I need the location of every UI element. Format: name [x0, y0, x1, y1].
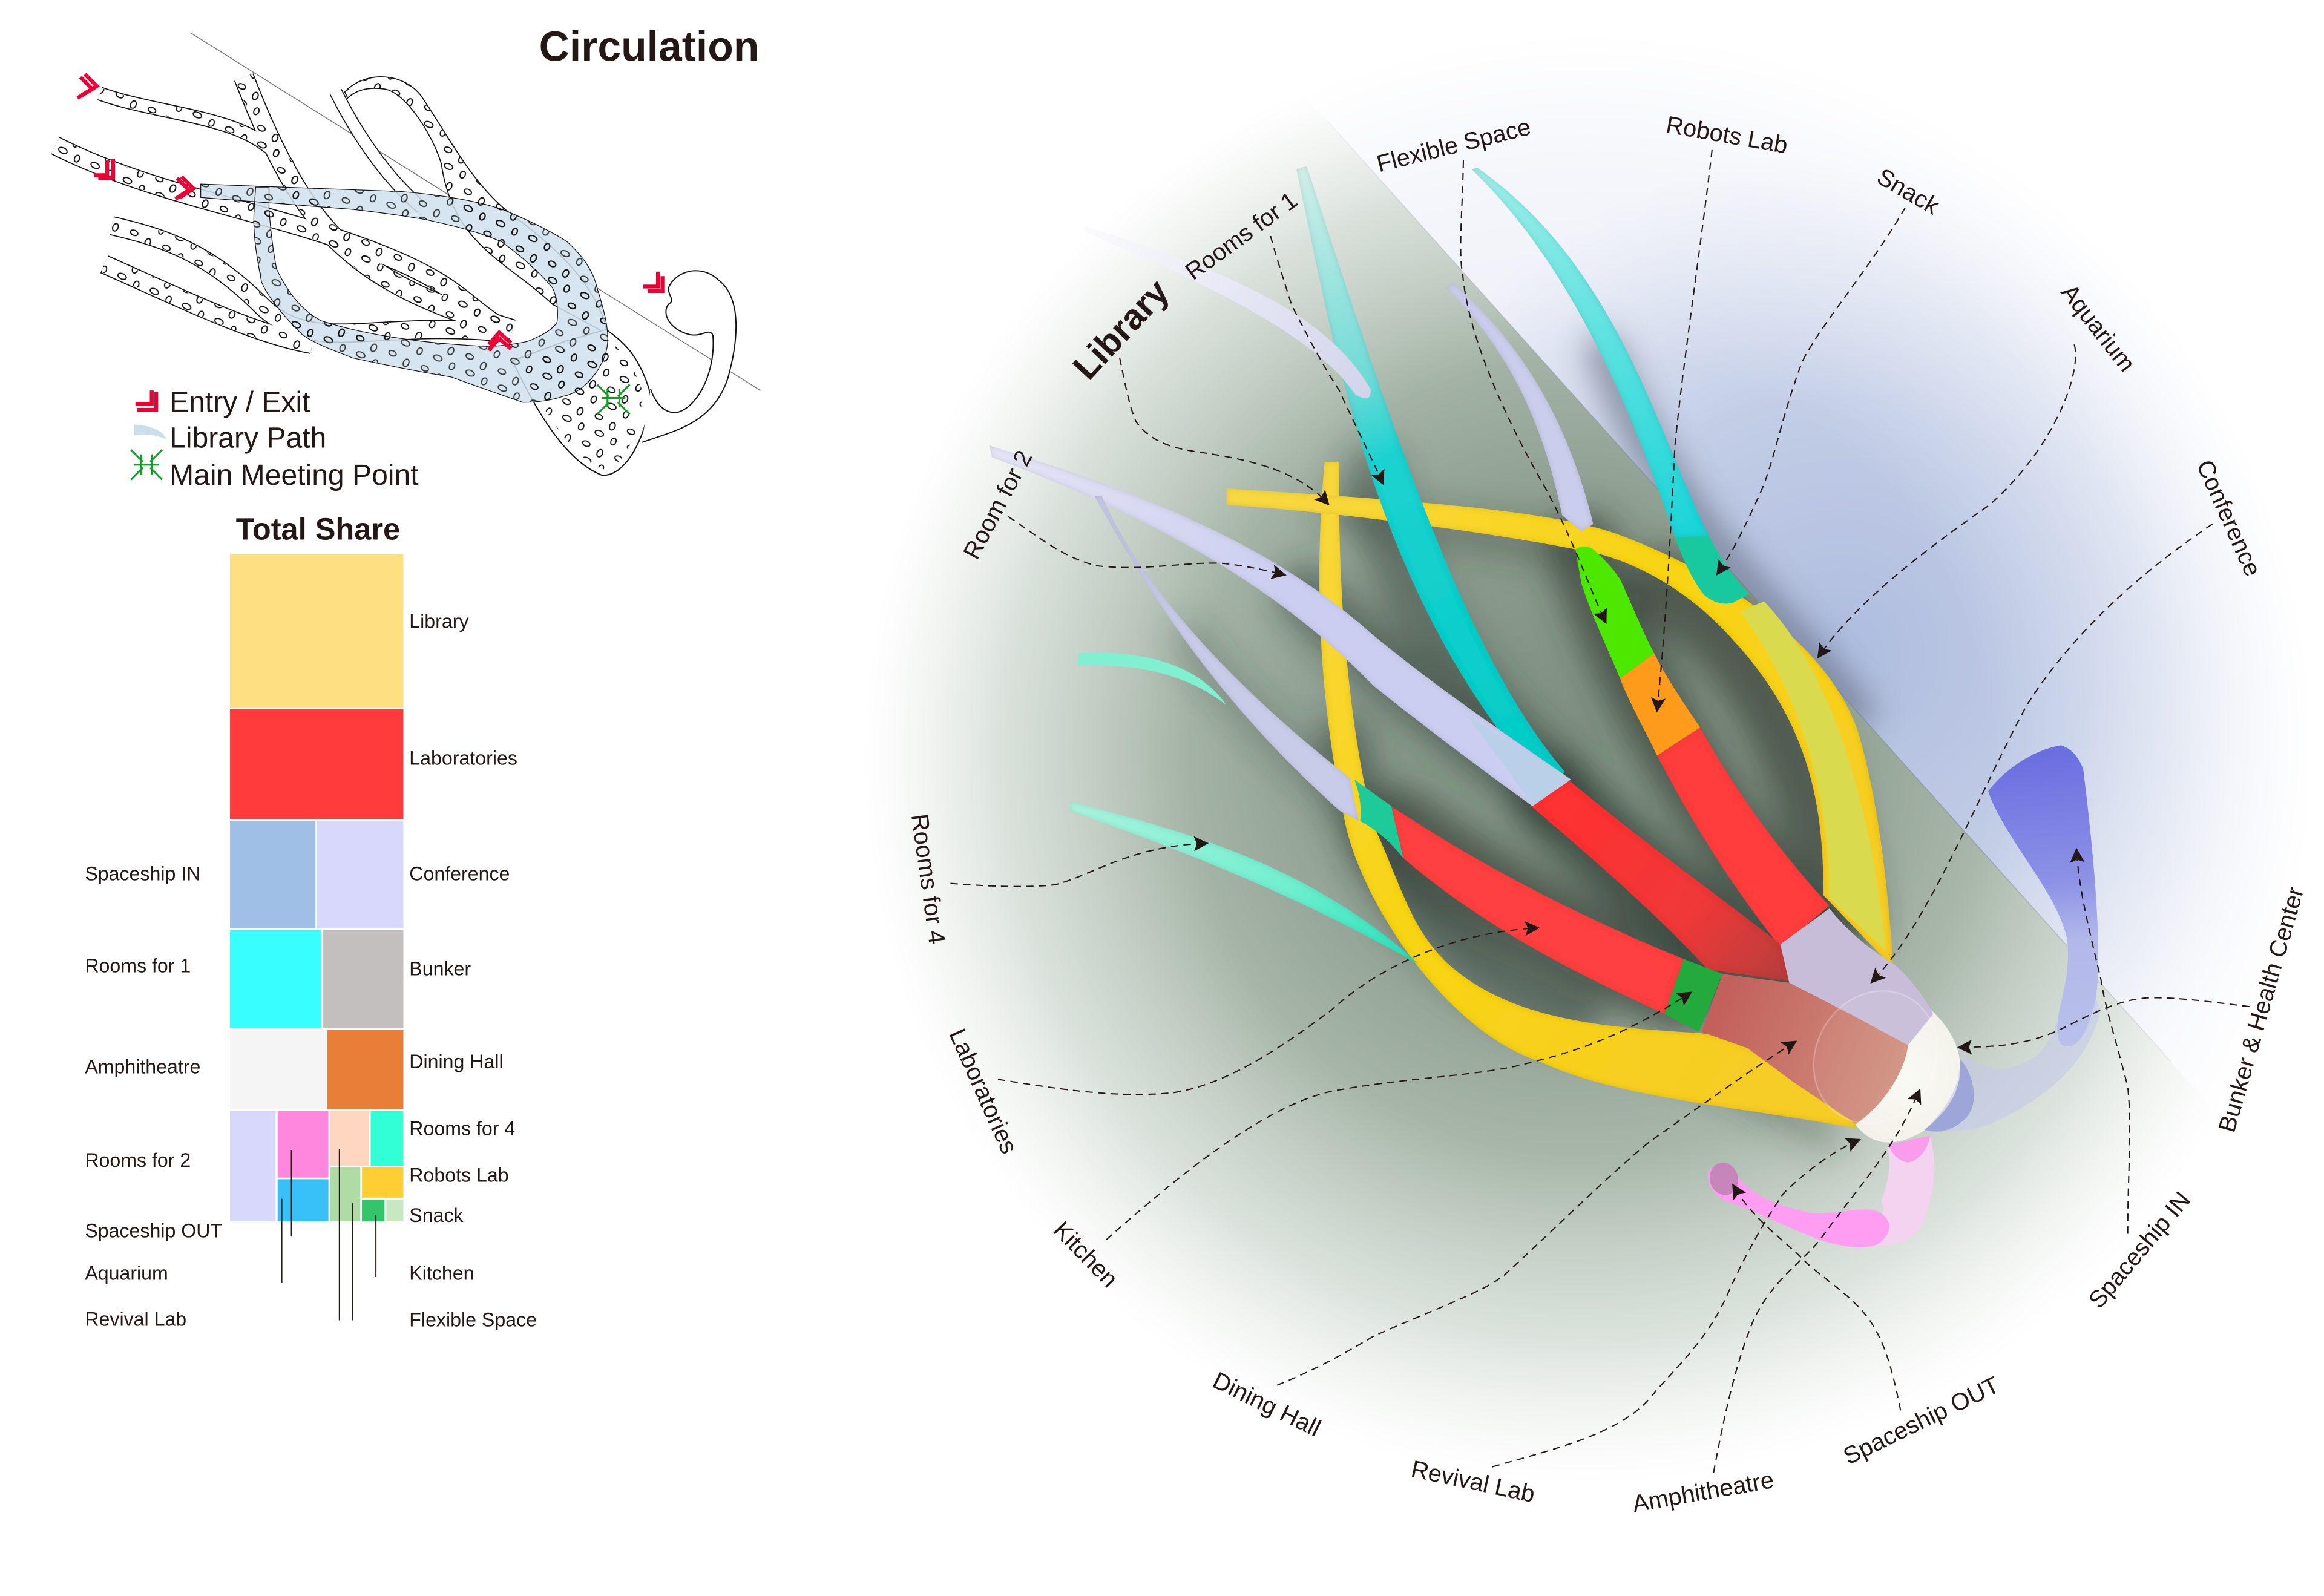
hairpin tube [345, 77, 608, 334]
tube: library main arc [1227, 488, 1893, 968]
legend: main meeting point: Main Meeting Point [169, 459, 419, 491]
radial labels: Revival Lab [1409, 1456, 1537, 1508]
leader: Conference [1873, 524, 2213, 981]
green field [906, 125, 2185, 1436]
treemap labels: Rooms for 4 [409, 1117, 515, 1139]
main meeting point marker [597, 384, 630, 414]
leader: Library [1120, 358, 1328, 504]
tube: thin lavender [1446, 282, 1594, 531]
tube: bunker link [1925, 965, 2101, 1131]
tube: rooms for 1 [1296, 166, 1565, 787]
panel: circulation sketch [55, 33, 760, 475]
appendix tail [642, 271, 736, 442]
treemap labels: Amphitheatre [85, 1056, 200, 1077]
field divider [1328, 121, 2171, 1062]
radial labels: Rooms for 1 [1181, 187, 1302, 285]
panel: circular field background [906, 121, 2253, 1436]
tube: center green segment [1575, 547, 1654, 678]
leader: Room for 2 [1008, 517, 1284, 574]
diagram: spaceship tube structure [989, 166, 2101, 1247]
radial labels: Snack [1873, 163, 1944, 220]
legend: entry / exit: Entry / Exit [169, 386, 310, 419]
leader: Snack [1718, 208, 1905, 573]
crescent [1925, 1059, 1974, 1132]
radial labels: Dining Hall [1209, 1367, 1325, 1442]
treemap labels: Dining Hall [409, 1051, 504, 1072]
library translucent overlay [1740, 601, 1886, 950]
end capsule glass highlight [1790, 968, 1961, 1146]
end capsule: white sphere [1841, 995, 1960, 1143]
treemap labels: Aquarium [85, 1262, 168, 1284]
leader: Amphitheatre [1713, 1091, 1919, 1473]
leader: Rooms for 4 [950, 843, 1206, 887]
tube: rooms top lavender [1084, 226, 1371, 398]
tube: bunker and health center [1988, 745, 2098, 1046]
radial labels: Laboratories [944, 1025, 1022, 1158]
treemap labels: Rooms for 1 [85, 955, 191, 977]
treemap labels: Snack [409, 1204, 464, 1226]
heading: Total Share: Total Share [236, 512, 400, 547]
treemap labels: Library [409, 611, 469, 632]
tube outlines [55, 77, 513, 344]
leader: Revival Lab [1492, 1140, 1858, 1467]
spot pattern [55, 77, 513, 344]
tube: spaceship out [1707, 1164, 1889, 1247]
axis line [190, 33, 760, 390]
tube: spaceship out pale [1869, 1136, 1934, 1246]
tube: laboratories middle [1531, 780, 1789, 981]
treemap labels [85, 611, 537, 1331]
radial labels: Library [1066, 272, 1177, 387]
leader: Kitchen [1106, 993, 1690, 1240]
tube: teal end [1675, 536, 1749, 603]
tube: rooms for 1 right [1471, 168, 1709, 537]
leader: Dining Hall [1277, 1042, 1794, 1385]
pink under sphere [1889, 1136, 1930, 1163]
radial labels: Room for 2 [958, 446, 1037, 563]
radial labels: Amphitheatre [1630, 1466, 1776, 1517]
radial labels: Conference [2191, 456, 2266, 580]
treemap labels: Bunker [409, 958, 471, 980]
tube: rooms for 4 short [1078, 653, 1227, 705]
treemap labels: Spaceship IN [85, 863, 200, 885]
legend: main meeting point [131, 450, 419, 491]
leader: Spaceship IN [2076, 851, 2130, 1233]
entry markers [77, 74, 663, 350]
leader: Bunker & Health Center [1960, 997, 2250, 1048]
tube: rooms for 4 lower [1069, 802, 1418, 964]
tube: room for 2 pale end [1466, 714, 1571, 806]
leader: Aquarium [1819, 344, 2075, 656]
leader: Flexible Space [1461, 160, 1605, 622]
tube: teal junction [1354, 780, 1403, 858]
leader: Laboratories [998, 928, 1537, 1094]
treemap labels: Conference [409, 863, 510, 885]
tube: laboratories lower [1391, 806, 1684, 1014]
title: Circulation: Circulation [539, 23, 759, 70]
tube opening [1706, 1160, 1742, 1198]
radial labels: Flexible Space [1374, 114, 1534, 177]
radial labels [906, 111, 2309, 1517]
leader: Robots Lab [1657, 150, 1712, 710]
radial labels: Bunker & Health Center [2214, 884, 2309, 1135]
tube: center orange segment [1620, 653, 1700, 756]
treemap labels: Spaceship OUT [85, 1220, 222, 1242]
end capsule: salmon cover [1702, 974, 1908, 1124]
legend: library path: Library Path [169, 422, 326, 455]
treemap labels: Kitchen [409, 1262, 474, 1284]
tube: library vertical branch [1319, 462, 1856, 1128]
treemap labels: Robots Lab [409, 1164, 509, 1186]
treemap: total share [230, 554, 404, 1320]
radial labels: Robots Lab [1664, 111, 1790, 159]
tube: center red segment [1657, 727, 1830, 947]
leader lines [950, 150, 2250, 1473]
tube: kitchen band [1664, 959, 1722, 1032]
leader: Spaceship OUT [1734, 1186, 1900, 1410]
tube: room for 2 second branch [1094, 496, 1359, 821]
radial labels: Spaceship OUT [1839, 1371, 2003, 1470]
legend [131, 386, 419, 491]
blue field [1382, 151, 2253, 1035]
end capsule: lavender cover [1781, 908, 1933, 1045]
leader: Rooms for 1 [1270, 236, 1382, 482]
treemap labels: Rooms for 2 [85, 1149, 191, 1171]
library path highlight [201, 184, 608, 402]
treemap leader lines [282, 1149, 376, 1320]
building body [513, 330, 649, 475]
radial labels: Aquarium [2056, 280, 2140, 377]
treemap labels: Flexible Space [409, 1309, 537, 1331]
tube: room for 2 lavender [989, 445, 1571, 806]
treemap labels: Laboratories [409, 747, 517, 769]
radial labels: Kitchen [1048, 1217, 1123, 1293]
radial labels: Rooms for 4 [906, 812, 950, 945]
treemap labels: Revival Lab [85, 1309, 186, 1330]
radial labels: Spaceship IN [2084, 1187, 2196, 1313]
